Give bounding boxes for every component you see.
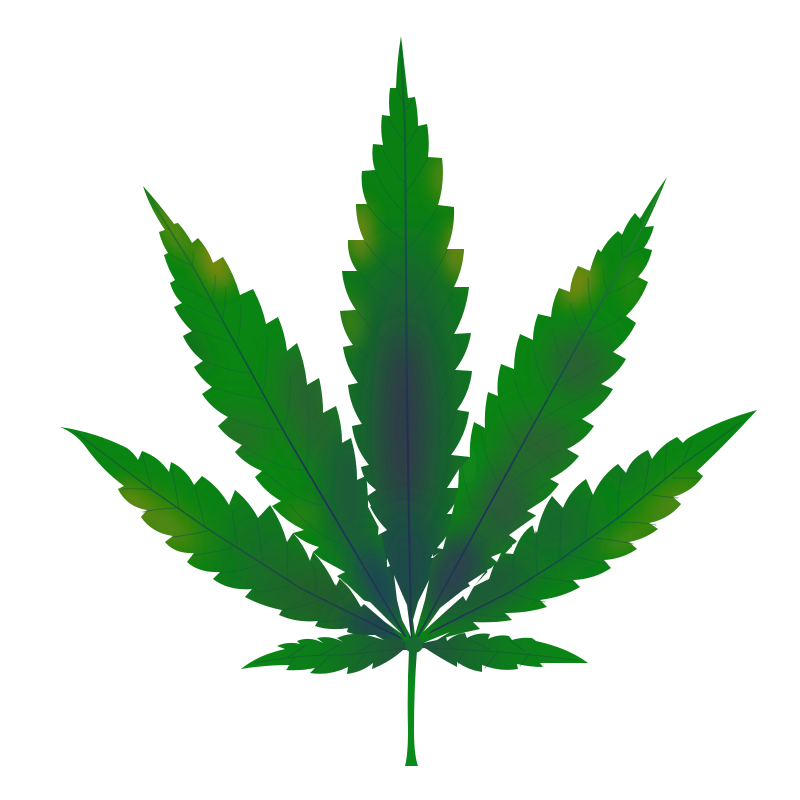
midrib: upper right: [418, 190, 660, 636]
leaflet: small bottom left: [241, 634, 412, 674]
midrib: upper left: [146, 192, 405, 636]
leaflet: small bottom right: [416, 633, 588, 672]
leaflet: upper right: [408, 170, 675, 645]
gaps between leaflets: [323, 469, 550, 643]
midrib: centre: [401, 45, 411, 640]
stem: [405, 650, 418, 766]
side veins: lower right: [470, 440, 700, 616]
midrib: lower left: [75, 432, 405, 640]
leaflet: centre: [340, 36, 472, 638]
side veins: upper left: [170, 252, 375, 586]
side veins: centre: [358, 88, 457, 550]
side veins: lower left: [123, 453, 350, 622]
side veins: upper right: [448, 217, 642, 590]
leaflet: lower left: [60, 427, 406, 642]
midrib: lower right: [423, 423, 740, 636]
illustration: seven-fingered green leaf: [60, 36, 757, 766]
leaflet: upper left: [135, 180, 421, 645]
leaf node: [405, 637, 423, 653]
leaflet: lower right: [422, 410, 757, 642]
